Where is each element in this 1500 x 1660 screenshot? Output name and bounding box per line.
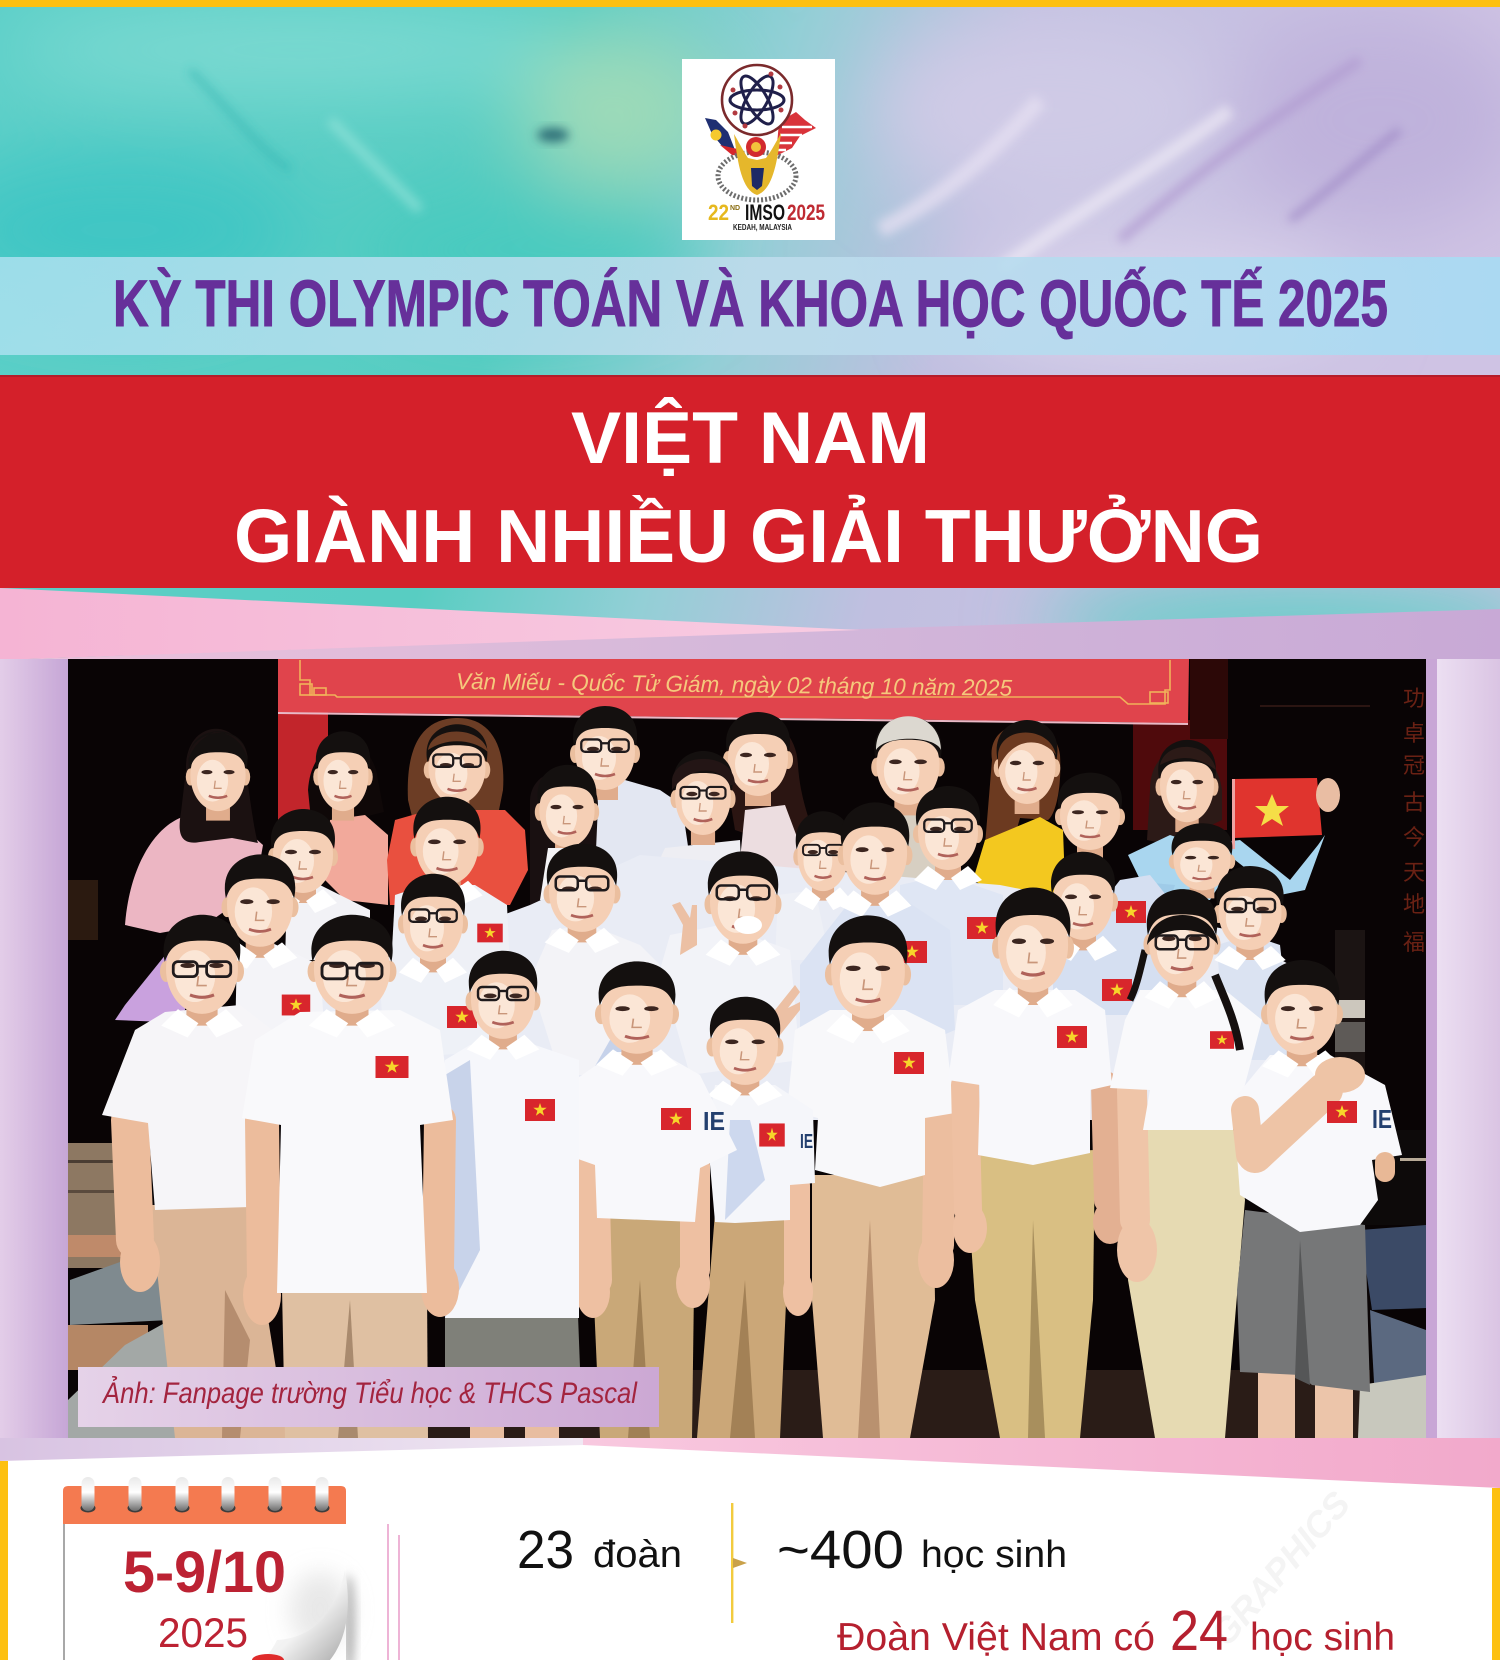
- wall calligraphy: 福: [1403, 930, 1425, 955]
- left side strip: [0, 659, 68, 1438]
- logo: wordmark: IMSO: [745, 200, 785, 225]
- second row: boy with glasses: [398, 874, 477, 1028]
- front row: boy 2: [242, 915, 459, 1438]
- second row: boy head: [838, 802, 912, 917]
- front row: boy with grey shorts: [1233, 960, 1402, 1440]
- calendar page curl: [252, 1570, 350, 1660]
- wall calligraphy: [1403, 686, 1425, 955]
- yellow side rails: [0, 1461, 1500, 1660]
- red headline panel: [0, 375, 1500, 588]
- stat: Vietnam team: [837, 1599, 1395, 1660]
- banner border: [300, 660, 1170, 704]
- pink divider: [387, 1524, 400, 1660]
- back row: woman in salmon: [308, 731, 388, 905]
- stat: students: ~400: [777, 1520, 904, 1580]
- headline line 2: GIÀNH NHIỀU GIẢI THƯỞNG: [234, 494, 1263, 578]
- banner text: Văn Miếu - Quốc Tử Giám, ngày 02 tháng 10 năm 2025: [456, 668, 1012, 701]
- ground: stones and bricks: [68, 1000, 1426, 1440]
- gold divider: [731, 1503, 747, 1623]
- back row: girl: [530, 765, 600, 905]
- wall calligraphy: 今: [1403, 825, 1425, 850]
- calendar header: [63, 1486, 346, 1524]
- sleeve logos: IE: [703, 1106, 725, 1136]
- back row: woman in pink: [115, 729, 263, 1022]
- back row: old man: [871, 716, 945, 890]
- group photo: [68, 659, 1426, 1440]
- logo: wordmark: [708, 200, 825, 232]
- stat: delegations: đoàn: [593, 1534, 682, 1576]
- second row: laughing boy with victory signs: [660, 851, 800, 1075]
- second row: boy left: [222, 854, 325, 1040]
- logo: gold V emblem: [734, 133, 781, 195]
- logo: wordmark: ND: [730, 205, 740, 212]
- sleeve logos: IE: [800, 1131, 813, 1153]
- second row: boy with two flags: [1048, 852, 1170, 1015]
- wall calligraphy: 冠: [1403, 753, 1425, 778]
- header background: teal and lavender marble: [0, 0, 1500, 665]
- logo: Malaysia maps: [705, 112, 816, 158]
- back row: woman in light blue: [1128, 740, 1325, 900]
- front row: boy 3 with shorts: [438, 951, 580, 1440]
- ribbon wedges below photo: [0, 1438, 1500, 1660]
- stat: Vietnam team: Đoàn Việt Nam có: [837, 1616, 1155, 1659]
- wall calligraphy: 卓: [1403, 721, 1425, 746]
- front row: boy 5: [697, 997, 815, 1438]
- shirts massed behind the children: [322, 863, 1286, 1120]
- watermark: GRAPHICS: [1202, 1483, 1358, 1654]
- back row: girl with glasses: [662, 751, 741, 862]
- stat: delegations: 23: [517, 1520, 574, 1580]
- sleeve logos: [703, 1104, 1392, 1153]
- second row: boy at right: [1213, 866, 1293, 1060]
- wall calligraphy: 古: [1403, 790, 1425, 815]
- red flag with yellow star: [1232, 778, 1340, 849]
- photo credit caption: Ảnh: Fanpage trường Tiểu học & THCS Pascal: [101, 1376, 638, 1410]
- stat: students: [777, 1520, 1067, 1580]
- logo: wordmark: KEDAH, MALAYSIA: [733, 223, 792, 232]
- front row: girl with braids: [1110, 889, 1262, 1438]
- logo: IMSO 2025: [682, 59, 835, 240]
- stat: students: học sinh: [921, 1534, 1067, 1576]
- sleeve logos: IE: [1372, 1104, 1392, 1134]
- top yellow bar: [0, 0, 1500, 7]
- stat: Vietnam team: học sinh: [1250, 1616, 1395, 1659]
- banner: [278, 659, 1189, 725]
- back row: woman in yellow: [973, 720, 1065, 900]
- logo: wordmark: 2025: [787, 200, 825, 225]
- right side strip: [1426, 659, 1500, 1438]
- calendar icon: [63, 1477, 355, 1660]
- wall calligraphy: 地: [1403, 892, 1425, 917]
- wall calligraphy: 天: [1403, 860, 1425, 885]
- second row: boys behind: [268, 773, 1235, 1005]
- ribbon wedges above photo: [0, 588, 1500, 660]
- stat: delegations: [517, 1520, 682, 1580]
- photo background: temple doorway: [68, 659, 1426, 1438]
- photo credit caption: [78, 1367, 659, 1427]
- wall calligraphy: 功: [1403, 686, 1425, 711]
- calendar year: 2025: [158, 1609, 248, 1656]
- front row: boy 1: [102, 915, 287, 1438]
- second row: girl in glasses: [530, 844, 660, 1075]
- headline line 1: VIỆT NAM: [571, 398, 930, 479]
- front row: boy 7 in khaki: [948, 888, 1127, 1438]
- logo: atom: [722, 65, 792, 135]
- logo: wreath: [718, 152, 796, 200]
- back row: man with glasses: [570, 706, 690, 870]
- calendar date: 5-9/10: [123, 1540, 286, 1605]
- second row: boy with flag on chest: [800, 906, 955, 1034]
- title band: [0, 257, 1500, 355]
- back row: woman in white ao dai: [723, 712, 808, 868]
- calendar rings: [80, 1477, 330, 1512]
- front row: boy 4: [547, 961, 737, 1438]
- front row: boy 6 in khaki: [787, 915, 955, 1438]
- dark marble spot: [537, 128, 569, 142]
- back row: woman in red: [387, 718, 528, 905]
- logo: wordmark: 22: [708, 200, 729, 225]
